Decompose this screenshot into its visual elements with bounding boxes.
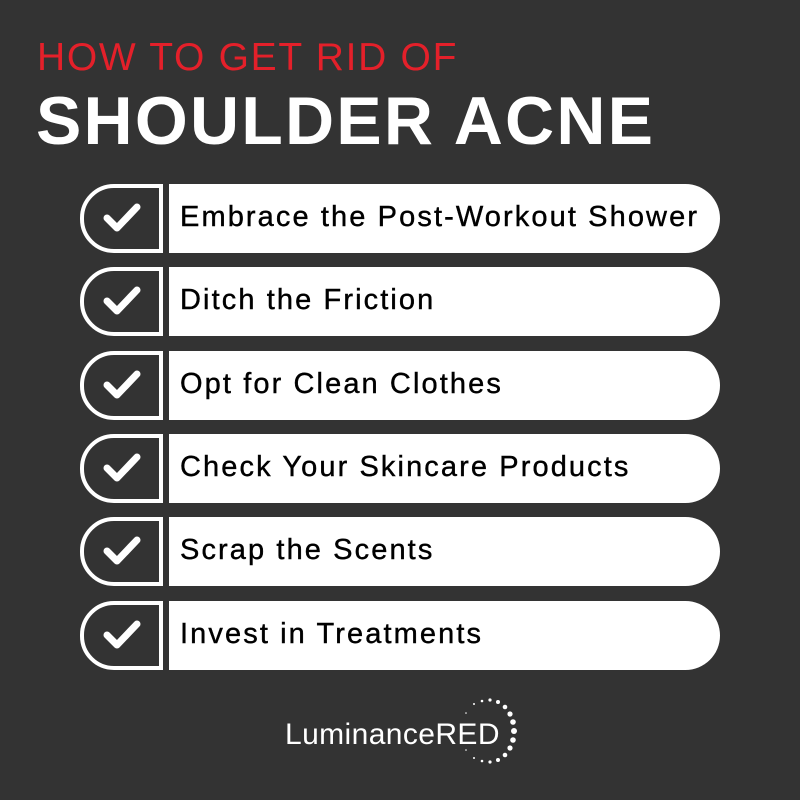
- label: Invest in Treatments: [180, 618, 483, 650]
- icon: check: [80, 267, 163, 336]
- label: [169, 434, 720, 503]
- icon: check: [80, 351, 163, 420]
- label: [169, 267, 720, 336]
- item 1: [80, 184, 720, 253]
- label: [169, 601, 720, 670]
- title line 2: SHOULDER ACNE: [36, 83, 655, 159]
- label: Check Your Skincare Products: [180, 451, 631, 483]
- logo: [285, 698, 517, 764]
- icon: check: [80, 517, 163, 586]
- icon: check: [80, 184, 163, 253]
- logo: LuminanceRED: [285, 718, 500, 751]
- label: [169, 351, 720, 420]
- label: Ditch the Friction: [180, 284, 435, 316]
- icon: check: [80, 601, 163, 670]
- label: Embrace the Post-Workout Shower: [180, 201, 699, 233]
- item 2: [80, 267, 720, 336]
- item 5: [80, 517, 720, 586]
- item 6: [80, 601, 720, 670]
- label: [169, 184, 720, 253]
- item 3: [80, 351, 720, 420]
- label: Scrap the Scents: [180, 534, 434, 566]
- icon: check: [80, 434, 163, 503]
- title line 1: HOW TO GET RID OF: [37, 36, 458, 79]
- label: [169, 517, 720, 586]
- item 4: [80, 434, 720, 503]
- label: Opt for Clean Clothes: [180, 368, 503, 400]
